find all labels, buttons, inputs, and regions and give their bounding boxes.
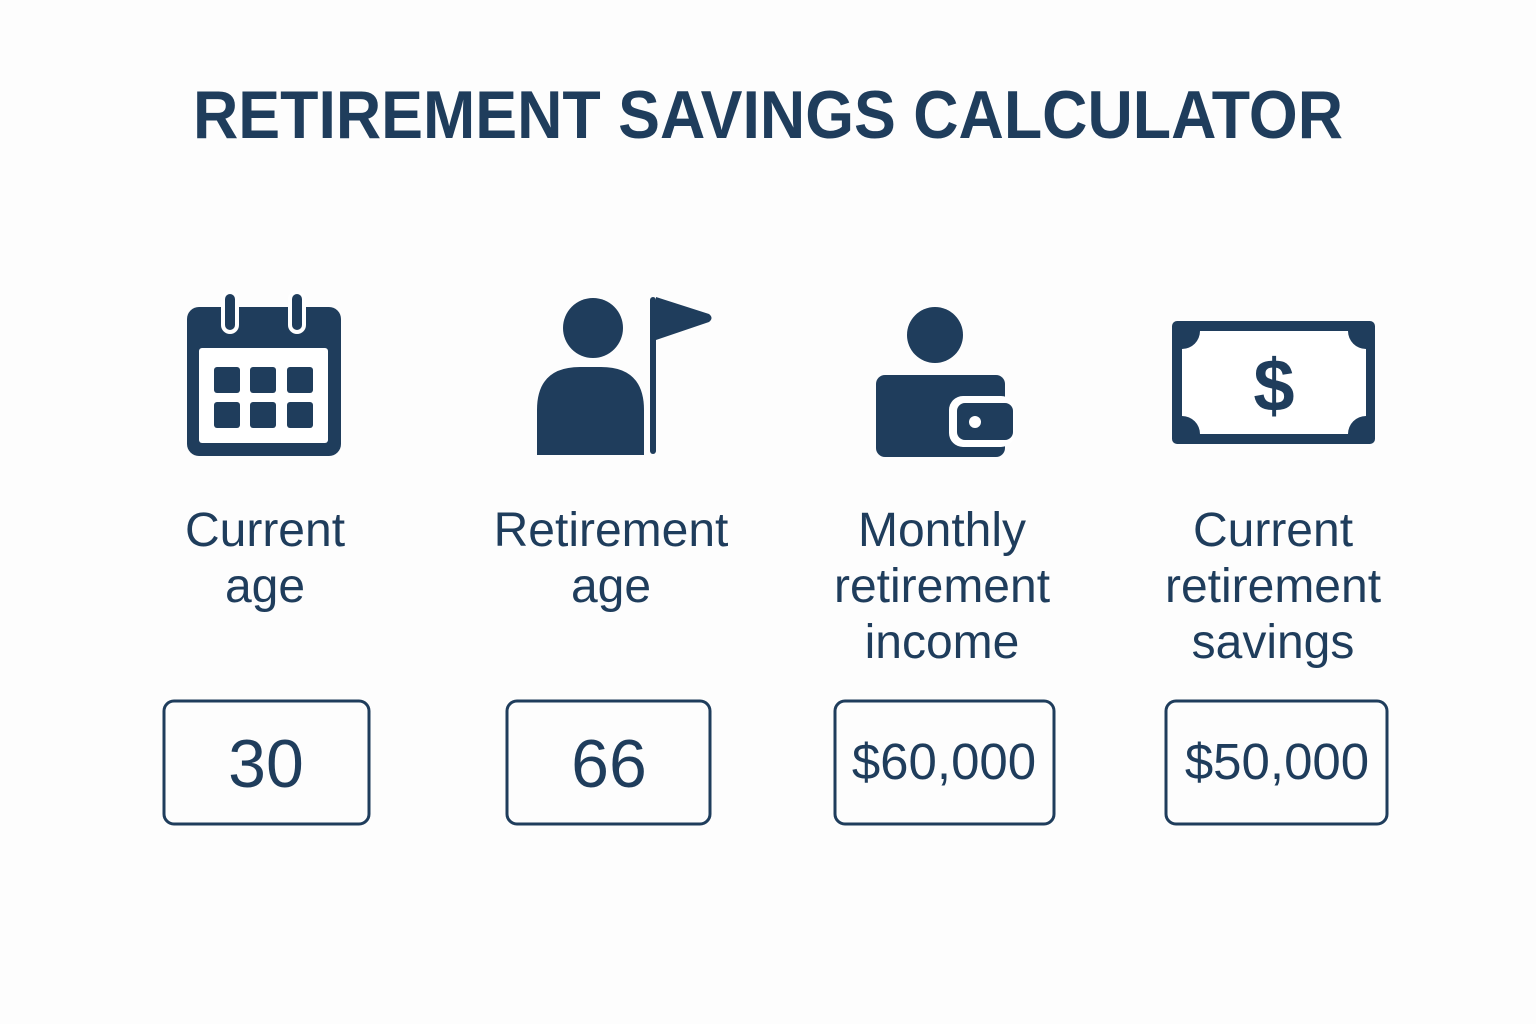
value box: $50,000: [1166, 701, 1387, 824]
icon: person with flag: [537, 297, 712, 455]
icon: calendar: [187, 290, 341, 456]
value box: 66: [507, 701, 710, 824]
label: monthly retirement income: retirement: [834, 560, 1050, 613]
value box: $50,000: $50,000: [1185, 733, 1369, 790]
label: retirement age: [494, 504, 728, 613]
value box: $60,000: $60,000: [852, 733, 1036, 790]
label: monthly retirement income: Monthly: [858, 504, 1026, 557]
label: current age: Current: [185, 504, 345, 557]
icon: dollar bill: $: [1253, 344, 1295, 427]
label: retirement age: Retirement: [494, 504, 728, 557]
label: current retirement savings: retirement: [1165, 560, 1381, 613]
icon: dollar bill: [1172, 321, 1375, 444]
label: retirement age: age: [571, 560, 651, 613]
label: monthly retirement income: income: [865, 616, 1019, 669]
value box: 66: 66: [571, 726, 647, 802]
title: RETIREMENT SAVINGS CALCULATOR: [193, 77, 1343, 153]
label: current retirement savings: [1165, 504, 1381, 669]
label: current age: [185, 504, 345, 613]
value box: 30: [164, 701, 369, 824]
value box: $60,000: [835, 701, 1054, 824]
label: current retirement savings: Current: [1193, 504, 1353, 557]
value box: 30: 30: [228, 726, 304, 802]
label: current age: age: [225, 560, 305, 613]
icon: person with wallet: [876, 307, 1015, 457]
label: monthly retirement income: [834, 504, 1050, 669]
label: current retirement savings: savings: [1192, 616, 1354, 669]
